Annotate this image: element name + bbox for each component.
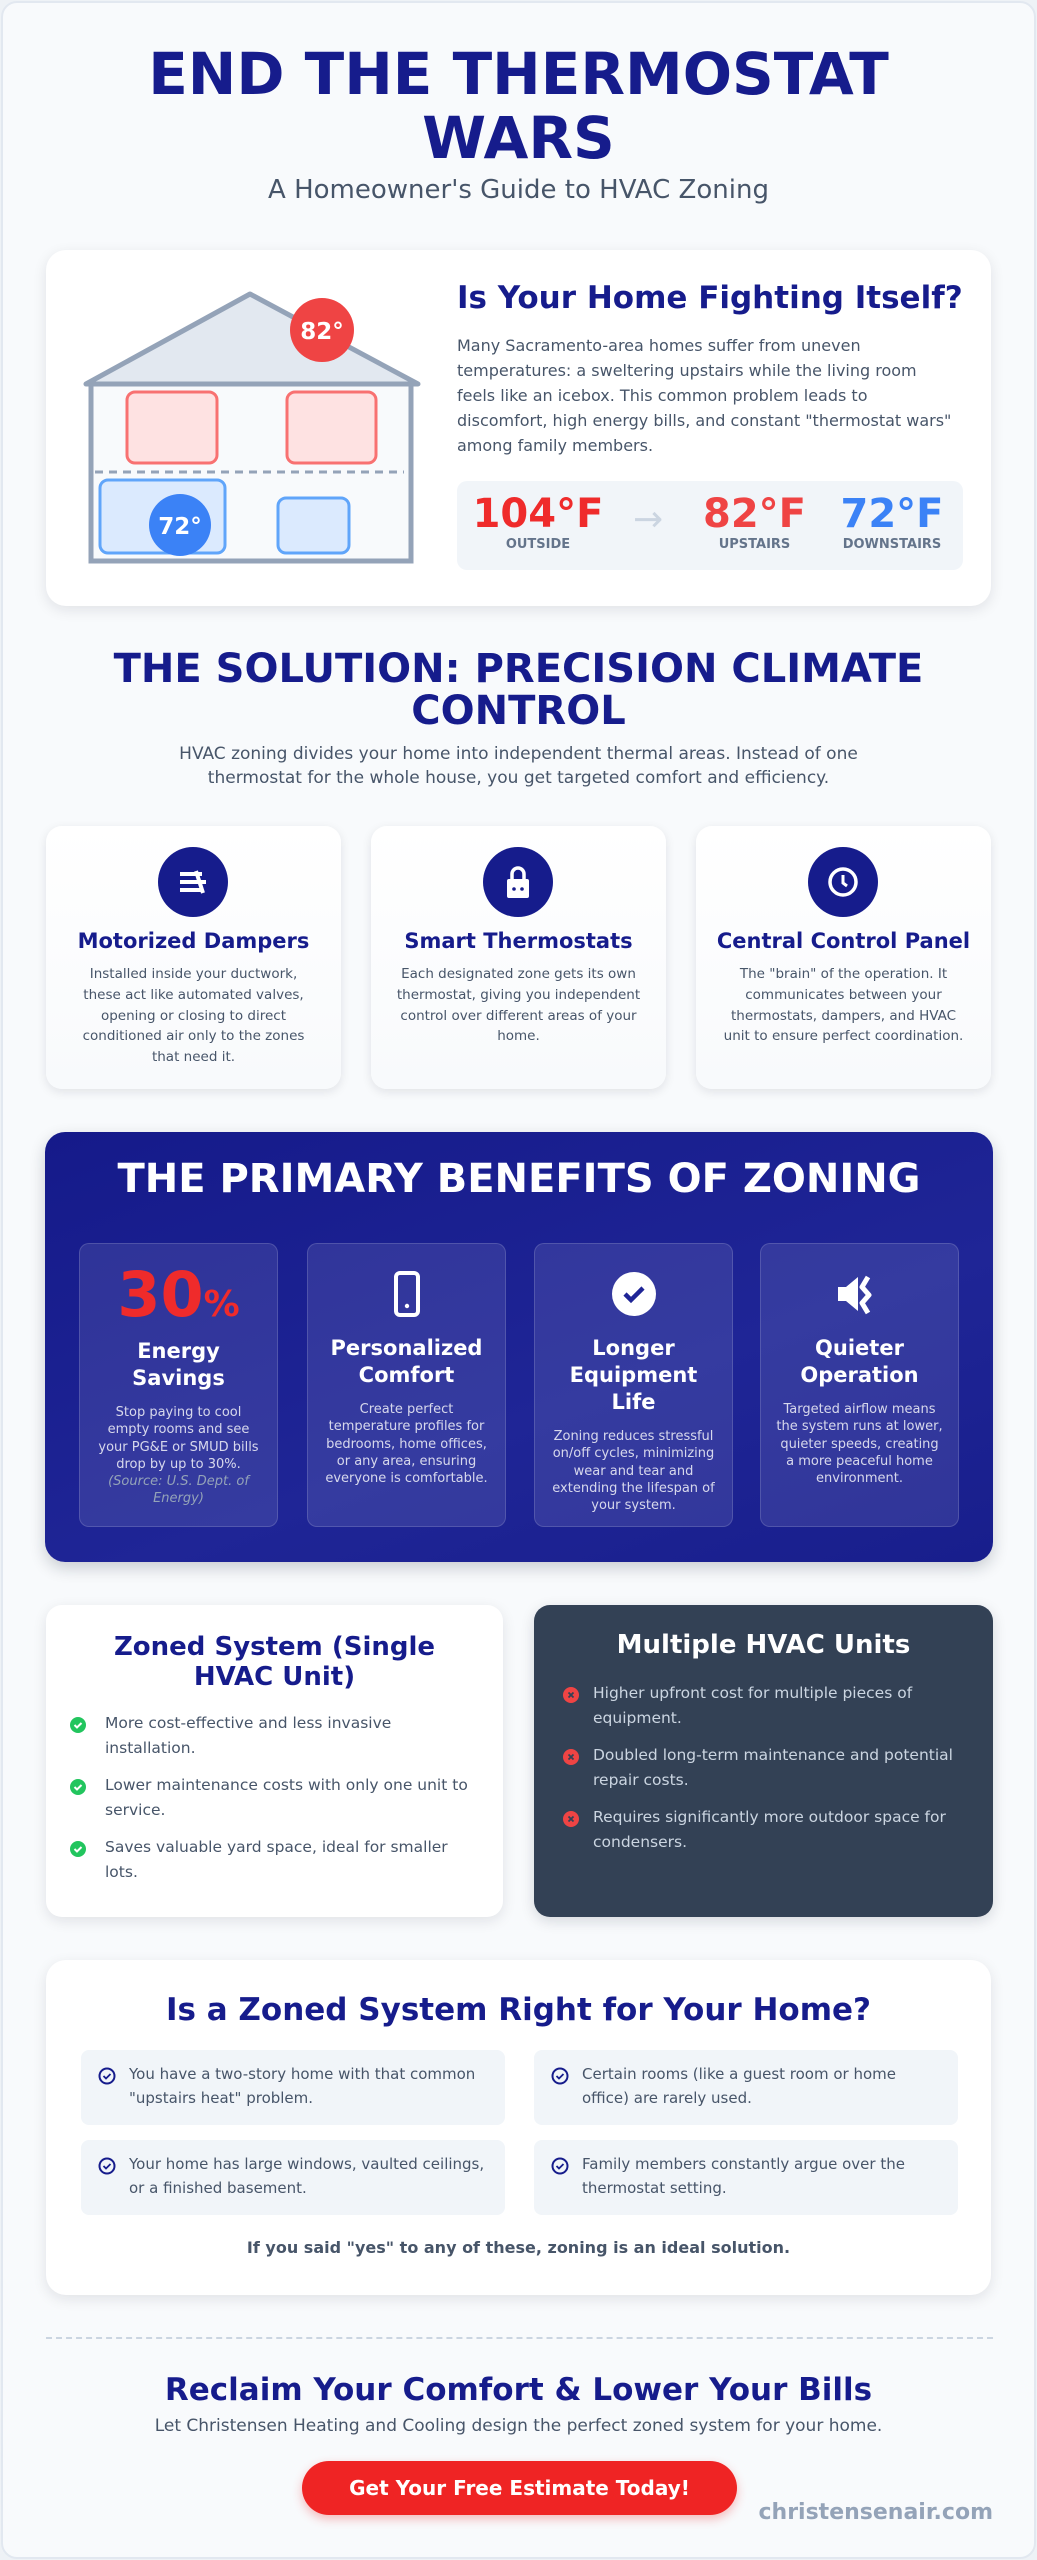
panel: checklist — [46, 1960, 991, 2295]
item 3: Your home has large windows, vaulted ceilings, or a finished basement. — [129, 2155, 484, 2197]
benefit: energy savings: Stop paying to cool empty rooms and see your PG&E or SMUD bills drop by up to 30%. (Source: U.S. Dept. of Energy) — [98, 1405, 259, 1506]
benefit: quieter operation: Targeted airflow means the system runs at lower, quieter speeds, creating a more peaceful home environment. — [776, 1402, 943, 1486]
title: WARS — [422, 104, 615, 172]
item 4: Family members constantly argue over the thermostat setting. — [582, 2155, 905, 2197]
temperature stats: OUTSIDE — [506, 537, 570, 552]
CTA button: Get Your Free Estimate Today! — [349, 2476, 690, 2500]
benefit: personalized comfort: Personalized — [331, 1336, 482, 1360]
icon: speaker — [838, 1276, 872, 1314]
item 3 — [81, 2140, 505, 2215]
temperature stats: 72°F — [840, 491, 944, 537]
icon: lock — [483, 847, 553, 917]
benefit: energy savings: Savings — [132, 1366, 225, 1390]
benefits heading: THE PRIMARY BENEFITS OF ZONING — [117, 1156, 921, 1202]
item 1 — [81, 2050, 505, 2125]
heading: HVAC Unit) — [194, 1662, 355, 1692]
card: smart thermostats: Smart Thermostats — [404, 929, 633, 953]
pros list: More cost-effective and less invasive installation. — [105, 1714, 391, 1756]
panel: problem — [46, 250, 991, 606]
panel: benefits — [45, 1132, 993, 1562]
icon: phone — [394, 1271, 420, 1317]
cons list — [563, 1684, 953, 1850]
benefit: longer equipment life: Equipment — [570, 1363, 697, 1387]
panel: multiple units cons — [534, 1605, 993, 1917]
benefit: energy savings: Energy — [137, 1339, 220, 1363]
cons list: Doubled long-term maintenance and potential repair costs. — [593, 1746, 953, 1788]
benefit: longer equipment life: Zoning reduces stressful on/off cycles, minimizing wear and tear and extending the lifespan of your system. — [552, 1429, 715, 1513]
item 1: You have a two-story home with that common "upstairs heat" problem. — [129, 2065, 475, 2107]
temperature stats: DOWNSTAIRS — [843, 537, 941, 552]
section heading: solution: THE SOLUTION: PRECISION CLIMATE — [114, 646, 923, 692]
section heading: solution: CONTROL — [411, 688, 626, 734]
icon: check circle — [612, 1272, 656, 1316]
heading: Is Your Home Fighting Itself? — [457, 280, 963, 316]
pros list: Saves valuable yard space, ideal for smaller lots. — [105, 1838, 448, 1880]
card: motorized dampers: Motorized Dampers — [78, 929, 309, 953]
pros list — [70, 1714, 468, 1880]
website url: christensenair.com — [758, 2500, 993, 2525]
heading: Zoned System (Single — [114, 1632, 435, 1662]
solution intro text: HVAC zoning divides your home into independent thermal areas. Instead of one thermostat for the whole house, you get targeted comfort and efficiency. — [179, 744, 858, 788]
benefit: energy savings — [79, 1243, 278, 1527]
heading: Multiple HVAC Units — [617, 1630, 910, 1660]
card: smart thermostats: Each designated zone gets its own thermostat, giving you independent control over different areas of your home. — [397, 966, 640, 1044]
benefit: longer equipment life — [534, 1243, 733, 1527]
checklist heading: Is a Zoned System Right for Your Home? — [166, 1992, 871, 2028]
card: smart thermostats — [371, 826, 666, 1089]
temperature stats: 104°F — [473, 491, 603, 537]
icon: clock — [808, 847, 878, 917]
panel: zoned system pros — [46, 1605, 503, 1917]
benefit: personalized comfort — [307, 1243, 506, 1527]
benefit: energy savings: 30% — [117, 1258, 240, 1331]
benefit: longer equipment life: Life — [612, 1390, 655, 1414]
house illustration — [84, 292, 420, 564]
card: central control panel — [696, 826, 991, 1089]
item 2: Certain rooms (like a guest room or home office) are rarely used. — [582, 2065, 896, 2107]
subtitle: A Homeowner's Guide to HVAC Zoning — [268, 175, 769, 205]
benefit: quieter operation — [760, 1243, 959, 1527]
section heading: solution — [114, 646, 923, 734]
pros list: Lower maintenance costs with only one unit to service. — [105, 1776, 468, 1818]
conclusion note: If you said "yes" to any of these, zoning is an ideal solution. — [247, 2238, 790, 2257]
arrow: → — [633, 499, 663, 540]
benefit: personalized comfort: Create perfect temperature profiles for bedrooms, home offices, or any area, ensuring everyone is comfortable. — [325, 1402, 488, 1486]
CTA button — [302, 2461, 737, 2515]
icon: dampers — [158, 847, 228, 917]
title — [148, 40, 889, 172]
card: central control panel: Central Control Panel — [717, 929, 970, 953]
benefit: longer equipment life: Longer — [592, 1336, 675, 1360]
paragraph: Many Sacramento-area homes suffer from uneven temperatures: a sweltering upstairs while the living room feels like an icebox. This common problem leads to discomfort, high energy bills, and constant "thermostat wars" among family members. — [457, 336, 951, 455]
temperature stats — [457, 481, 963, 570]
house illustration: 82° — [300, 319, 344, 345]
card: central control panel: The "brain" of the operation. It communicates between your thermostats, dampers, and HVAC unit to ensure perfect coordination. — [724, 966, 963, 1044]
item 2 — [534, 2050, 958, 2125]
heading — [114, 1632, 435, 1692]
house illustration: 72° — [158, 514, 202, 540]
cons list: Requires significantly more outdoor space for condensers. — [593, 1808, 946, 1850]
temperature stats: 82°F — [703, 491, 806, 537]
cons list: Higher upfront cost for multiple pieces of equipment. — [593, 1684, 912, 1726]
title: END THE THERMOSTAT — [148, 40, 889, 108]
card: motorized dampers — [46, 826, 341, 1089]
temperature stats: UPSTAIRS — [719, 537, 790, 552]
footer heading: Reclaim Your Comfort & Lower Your Bills — [165, 2372, 872, 2408]
footer text: Let Christensen Heating and Cooling design the perfect zoned system for your home. — [155, 2416, 882, 2436]
benefit: quieter operation: Operation — [800, 1363, 919, 1387]
benefit: personalized comfort: Comfort — [359, 1363, 454, 1387]
benefit: quieter operation: Quieter — [815, 1336, 904, 1360]
card: motorized dampers: Installed inside your ductwork, these act like automated valves, opening or closing to direct conditioned air only to the zones that need it. — [83, 966, 304, 1065]
item 4 — [534, 2140, 958, 2215]
